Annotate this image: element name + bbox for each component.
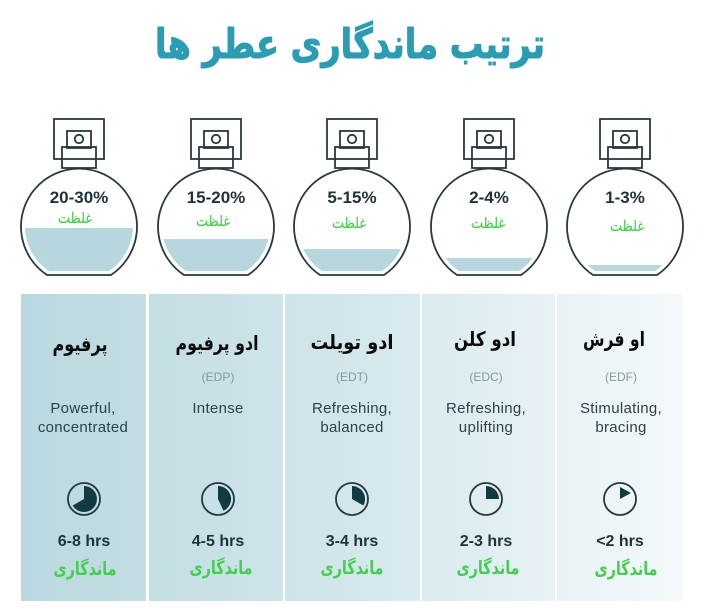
eau de toilette description: Refreshing, (312, 400, 392, 417)
eau fraiche name: او فرش (583, 327, 645, 351)
eau fraiche description (580, 400, 662, 436)
eau fraiche longevity label: ماندگاری (594, 558, 658, 580)
concentration 20-30%: 20-30% (50, 188, 108, 207)
eau de cologne name: ادو کلن (454, 327, 516, 351)
icon: clock 2-3 hours (470, 483, 502, 515)
eau de cologne duration: 2-3 hrs (460, 533, 512, 550)
panel: eau de cologne (422, 294, 555, 601)
icon: clock 3-4 hours (336, 483, 368, 515)
eau fraiche duration: <2 hrs (596, 533, 644, 550)
EDC abbreviation: (EDC) (469, 370, 503, 384)
perfume duration: 6-8 hrs (58, 533, 110, 550)
concentration label: غلظت (58, 211, 92, 227)
perfume description: Powerful, (50, 400, 116, 417)
bottle: 20-30% (19, 119, 139, 288)
concentration 2-4%: 2-4% (469, 188, 509, 207)
eau fraiche description: Stimulating, (580, 400, 662, 417)
concentration 1-3%: 1-3% (605, 188, 645, 207)
eau de toilette name: ادو تویلت (310, 330, 394, 354)
perfume longevity label: ماندگاری (54, 558, 116, 580)
eau de cologne description (446, 400, 526, 436)
perfume description: concentrated (38, 419, 128, 436)
concentration label: غلظت (332, 216, 366, 232)
eau de toilette description: balanced (320, 419, 384, 436)
eau de cologne description: Refreshing, (446, 400, 526, 417)
EDT abbreviation: (EDT) (336, 370, 368, 384)
concentration label: غلظت (610, 219, 644, 235)
eau de parfum longevity label: ماندگاری (190, 557, 252, 579)
eau de toilette duration: 3-4 hrs (326, 533, 378, 550)
icon: clock 4-5 hours (202, 483, 234, 515)
icon: clock under 2 hours (604, 483, 636, 515)
EDP abbreviation: (EDP) (202, 370, 234, 384)
panel: eau de toilette (285, 294, 420, 601)
eau de parfum description: Intense (192, 400, 244, 417)
concentration 5-15%: 5-15% (327, 188, 377, 207)
panel: eau fraiche (557, 294, 682, 601)
perfume name: پرفیوم (52, 332, 108, 357)
eau de cologne description: uplifting (459, 419, 513, 436)
title: ترتیب ماندگاری عطر ها (155, 20, 545, 68)
concentration label: غلظت (471, 216, 505, 232)
icon: clock 6-8 hours (68, 483, 100, 515)
eau de parfum duration: 4-5 hrs (192, 533, 244, 550)
bottle: 1-3% (565, 119, 685, 289)
panel: eau de parfum (149, 294, 283, 601)
bottle: 15-20% (156, 119, 276, 289)
panel: perfume (21, 294, 146, 601)
eau de parfum name: ادو پرفیوم (176, 331, 258, 356)
concentration label: غلظت (196, 214, 230, 230)
bottle: 2-4% (429, 119, 549, 288)
eau de toilette description (312, 400, 392, 436)
EDF abbreviation: (EDF) (605, 370, 637, 384)
bottle: 5-15% (292, 119, 412, 289)
eau fraiche description: bracing (595, 419, 647, 436)
perfume description (38, 400, 128, 436)
concentration 15-20%: 15-20% (187, 188, 245, 207)
eau de cologne longevity label: ماندگاری (456, 557, 520, 579)
eau de toilette longevity label: ماندگاری (320, 557, 384, 579)
